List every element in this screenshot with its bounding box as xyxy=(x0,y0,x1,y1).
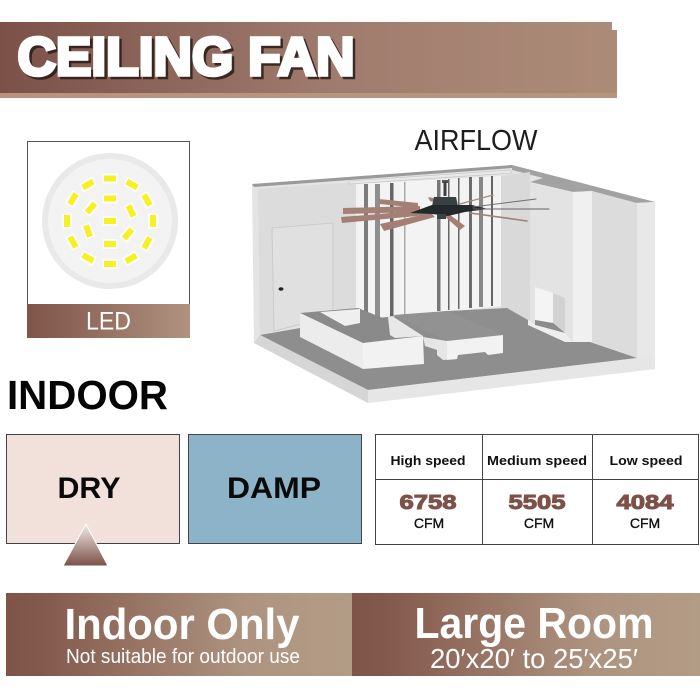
panel: dry xyxy=(6,434,180,544)
icon: selection arrow xyxy=(63,524,108,566)
back wall with slats xyxy=(349,170,512,322)
column: high speed: 6758 xyxy=(400,492,456,514)
panel: LED xyxy=(27,142,190,338)
column: medium speed: 5505 xyxy=(508,492,566,514)
column: medium speed: CFM xyxy=(524,515,554,531)
column: low speed: Low speed xyxy=(610,453,683,468)
column: low speed: 4084 xyxy=(616,492,675,514)
column: high speed xyxy=(390,453,466,531)
airflow heading: AIRFLOW xyxy=(414,125,538,157)
sofa xyxy=(300,308,424,369)
column: high speed: High speed xyxy=(390,453,466,468)
panel: dry: DRY xyxy=(58,472,120,505)
banner: indoor only: Not suitable for outdoor use xyxy=(66,646,300,668)
banner: large room xyxy=(352,593,700,676)
banner: large room: Large Room xyxy=(414,599,654,648)
room walls xyxy=(252,165,655,403)
column: high speed: CFM xyxy=(414,515,444,531)
banner: indoor only xyxy=(6,593,352,676)
header banner xyxy=(0,22,617,98)
column: low speed: CFM xyxy=(630,515,660,531)
banner: large room: 20′x20′ to 25′x25′ xyxy=(430,643,638,674)
ceiling fan xyxy=(341,180,549,231)
column: low speed xyxy=(610,453,683,531)
column: medium speed: Medium speed xyxy=(487,453,587,468)
alcove xyxy=(528,287,573,342)
floor xyxy=(260,308,637,390)
icon: LED light disc xyxy=(42,153,178,289)
title: CEILING FAN xyxy=(20,30,357,90)
bench xyxy=(393,311,503,360)
title: CEILING FAN xyxy=(18,27,354,87)
LED label band xyxy=(27,304,190,338)
panel: damp xyxy=(188,434,362,544)
room illustration xyxy=(252,165,655,403)
indoor heading: INDOOR xyxy=(7,372,168,418)
table: airflow by speed xyxy=(375,434,698,544)
panel: damp: DAMP xyxy=(227,472,321,505)
column: medium speed xyxy=(487,453,587,531)
LED label band: LED xyxy=(86,308,131,336)
banner: indoor only: Indoor Only xyxy=(64,600,300,649)
floor front edge xyxy=(254,335,368,403)
